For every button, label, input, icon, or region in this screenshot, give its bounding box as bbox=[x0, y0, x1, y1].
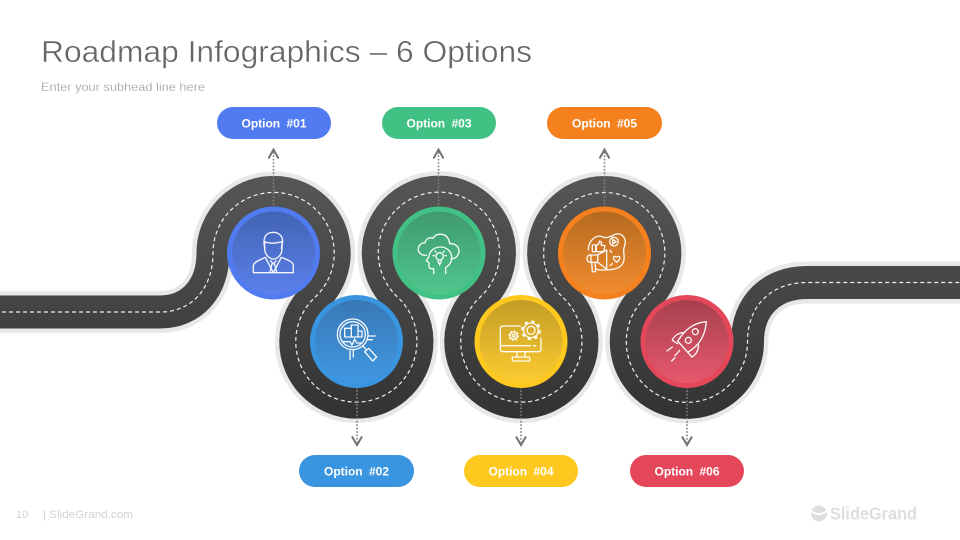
pill: option 06: Option #06 bbox=[654, 464, 720, 478]
title: Roadmap Infographics – 6 Options bbox=[41, 34, 532, 69]
node: option 06 circle bbox=[640, 295, 734, 388]
arrow: option 02 bbox=[352, 387, 362, 445]
node: option 02 circle bbox=[310, 295, 403, 388]
pill: option 02 bbox=[299, 455, 414, 487]
pill: option 05: Option #05 bbox=[572, 116, 637, 130]
pill: option 01: Option #01 bbox=[241, 116, 307, 130]
arrow: option 06 bbox=[682, 387, 692, 445]
page number: 10 bbox=[16, 509, 28, 521]
pill: option 05 bbox=[547, 107, 662, 139]
icon: monitor with gears bbox=[500, 321, 541, 361]
icon: marketing megaphone bbox=[587, 234, 625, 272]
icon: businessman bbox=[253, 232, 293, 273]
pill: option 04 bbox=[464, 455, 578, 487]
pill: option 01 bbox=[217, 107, 331, 139]
pill: option 03: Option #03 bbox=[406, 116, 472, 130]
pill: option 02: Option #02 bbox=[324, 464, 389, 478]
icon: rocket bbox=[667, 322, 706, 361]
arrow: option 03 bbox=[434, 150, 444, 208]
pill: option 06 bbox=[630, 455, 744, 487]
logo: SlideGrand bbox=[830, 504, 917, 524]
pill: option 04: Option #04 bbox=[488, 464, 554, 478]
node: option 03 circle bbox=[392, 206, 486, 300]
arrow: option 04 bbox=[516, 387, 526, 445]
arrow: option 01 bbox=[268, 150, 278, 208]
pill: option 03 bbox=[382, 107, 496, 139]
arrow: option 05 bbox=[600, 150, 610, 208]
node: option 05 circle bbox=[558, 206, 651, 300]
icon: cloud head idea bbox=[418, 234, 459, 274]
node: option 01 circle bbox=[227, 206, 320, 300]
icon: magnifier with chart bbox=[337, 319, 377, 361]
winding road bbox=[0, 192, 960, 402]
subhead: Enter your subhead line here bbox=[41, 80, 205, 94]
node: option 04 circle bbox=[474, 295, 568, 388]
footer source: | SlideGrand.com bbox=[43, 509, 133, 521]
